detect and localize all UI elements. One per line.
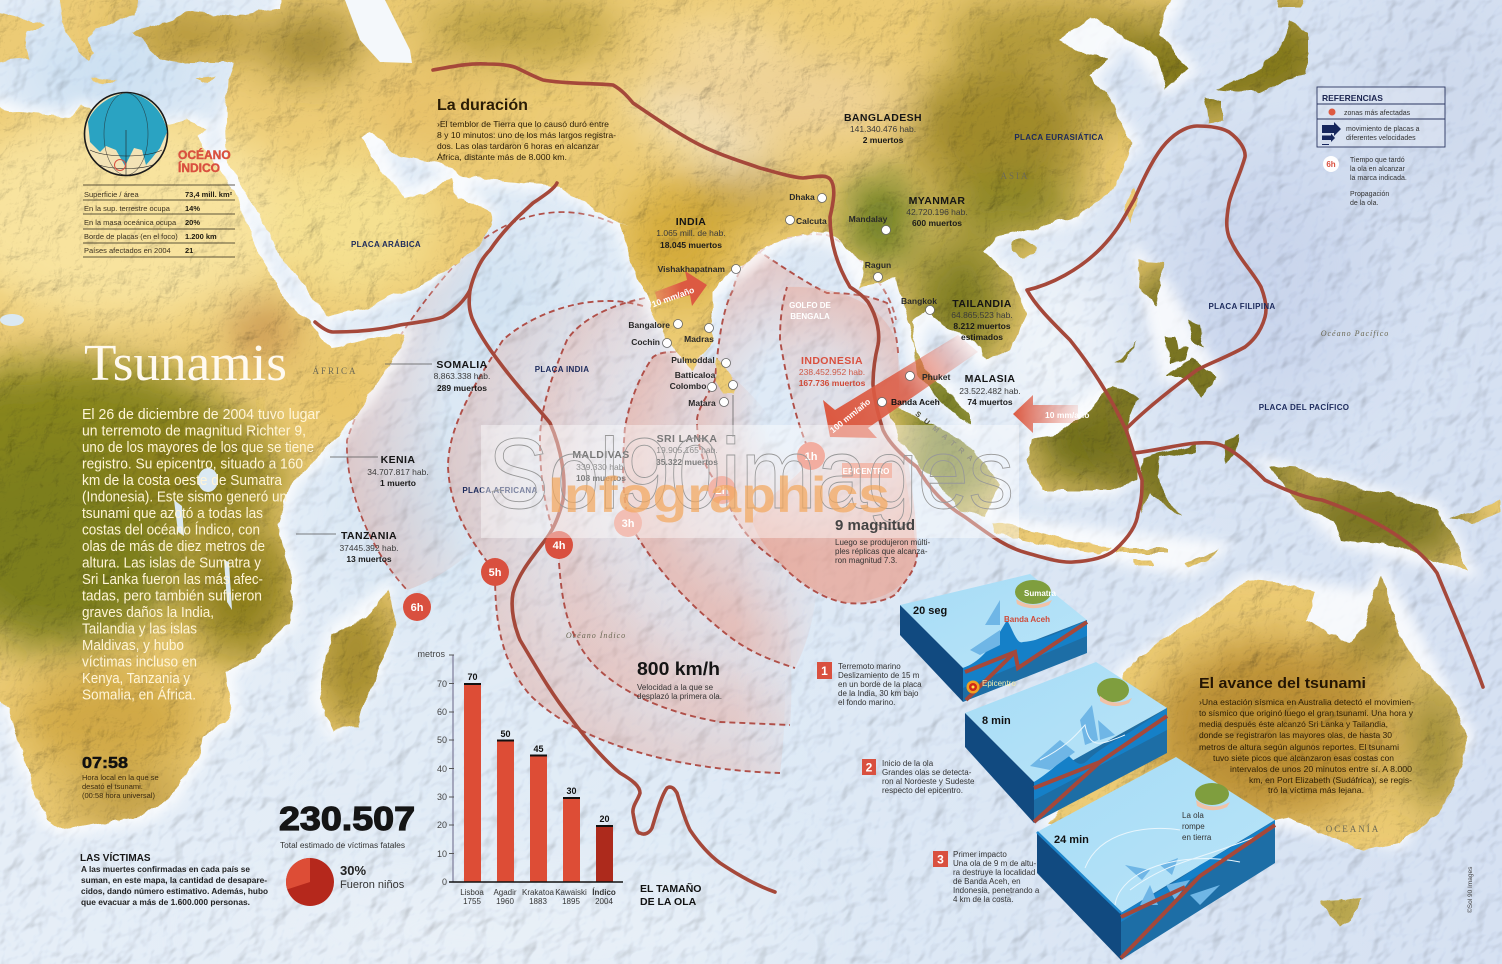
step 1 caption: de la India, 30 km bajo bbox=[838, 689, 919, 698]
plate names: PLACA ARÁBICA bbox=[351, 240, 421, 249]
country: Tailandia: TAILANDIA bbox=[952, 298, 1012, 310]
chart title bbox=[640, 882, 701, 908]
text: 800 km/h: Velocidad a la que se bbox=[637, 683, 714, 692]
country: India bbox=[656, 216, 726, 250]
watermark panel: Sol90images bbox=[488, 418, 1014, 530]
country: Indonesia: 167.736 muertos bbox=[799, 378, 866, 388]
text: 800 km/h bbox=[637, 659, 722, 701]
text: 800 km/h: desplazó la primera ola. bbox=[637, 692, 722, 701]
text block: El avance del tsunami: metros de altura según algunos reportes. El tsunami bbox=[1199, 742, 1399, 752]
legend: Referencias bbox=[1317, 87, 1445, 147]
step 2 caption: respecto del epicentro. bbox=[882, 786, 963, 795]
zone: 6 hours bbox=[347, 212, 613, 590]
geographic names: BENGALA bbox=[790, 312, 830, 321]
country: Maldivas: 108 muertos bbox=[576, 473, 626, 483]
country: Indonesia: INDONESIA bbox=[801, 355, 863, 367]
main paragraph: Tailandia y las islas bbox=[82, 620, 197, 638]
text block: El avance del tsunami: to sísmico que originó luego el gran tsunami. Una hora y bbox=[1199, 708, 1414, 718]
text block: La duración: dos. Las olas tardaron 6 horas en alcanzar bbox=[437, 141, 599, 151]
label: Epicentro: Epicentro bbox=[982, 679, 1016, 688]
step 2 caption: 2 bbox=[866, 760, 873, 774]
country: Malasia: 74 muertos bbox=[967, 397, 1013, 407]
text: 800 km/h: 800 km/h bbox=[637, 659, 720, 679]
text: Las víctimas: LAS VÍCTIMAS bbox=[80, 851, 151, 864]
leader lines bbox=[296, 364, 733, 534]
country: India: INDIA bbox=[676, 216, 706, 228]
main paragraph: (Indonesia). Este sismo generó un bbox=[82, 488, 287, 506]
label: wave breaks on land: La ola bbox=[1182, 811, 1204, 820]
bar chart: El tamaño de la ola: 20 bbox=[437, 820, 447, 830]
text block: La duración: ›El temblor de Tierra que lo causó duró entre bbox=[437, 119, 609, 129]
step 1 caption bbox=[817, 662, 922, 707]
country: India: 18.045 muertos bbox=[660, 240, 722, 250]
text block: El avance del tsunami: km, en Port Elizabeth (Sudáfrica), se regis- bbox=[1249, 775, 1412, 785]
text: 9 magnitud: Luego se produjeron múlti- bbox=[835, 538, 931, 547]
plate names: PLACA EURASIÁTICA bbox=[1014, 133, 1104, 142]
table: Indian Ocean facts: En la sup. terrestre ocupa bbox=[84, 204, 171, 213]
geographic names: OCEANÍA bbox=[1326, 824, 1380, 834]
time marker: 5h bbox=[481, 558, 509, 586]
text: 07:58: (00:58 hora universal) bbox=[82, 791, 155, 800]
text: 9 magnitud: ples réplicas que alcanza- bbox=[835, 547, 928, 556]
text: 9 magnitud: ron magnitud 7.3. bbox=[835, 556, 897, 565]
text block: El avance del tsunami: tró la víctima más lejana. bbox=[1268, 785, 1364, 795]
big number: total victims: 230.507 bbox=[279, 800, 415, 837]
bar chart: El tamaño de la ola: Agadir bbox=[493, 888, 517, 897]
country: Tanzania: TANZANIA bbox=[341, 530, 397, 542]
bar chart: El tamaño de la ola: metros bbox=[417, 649, 445, 659]
country: Tanzania: 37445.392 hab. bbox=[339, 543, 399, 553]
block diagram: 8 min bbox=[965, 662, 1167, 823]
city names: Bangalore bbox=[628, 320, 670, 330]
country: Maldivas bbox=[572, 449, 630, 483]
zone: 2 hours bbox=[697, 252, 917, 603]
main paragraph: olas de más de diez metros de bbox=[82, 538, 265, 555]
bar chart: El tamaño de la ola: 10 bbox=[437, 849, 447, 859]
bar chart: El tamaño de la ola bbox=[417, 649, 623, 906]
geographic names: ASIA bbox=[1000, 171, 1030, 181]
city names: Matara bbox=[688, 398, 716, 408]
main paragraph: tsunami que azotó a todas las bbox=[82, 505, 263, 522]
table: Indian Ocean facts: En la masa oceánica ocupa bbox=[84, 218, 177, 227]
city names: Madras bbox=[684, 334, 714, 344]
main paragraph: costas del océano Índico, con bbox=[82, 522, 260, 538]
chart title: EL TAMAÑO bbox=[640, 882, 701, 895]
text: Las víctimas: que evacuar a más de 1.600.000 personas. bbox=[81, 897, 250, 907]
boundary: Himalaya bbox=[433, 64, 1266, 562]
main paragraph: graves daños la India, bbox=[82, 604, 214, 621]
bar: Agadir 1960 bbox=[497, 729, 514, 882]
country: Bangladesh: 141.340.476 hab. bbox=[850, 124, 916, 134]
city names: Colombo bbox=[670, 381, 706, 391]
text: Las víctimas: suman, en este mapa, la cantidad de desapare- bbox=[81, 875, 267, 885]
zone: 3 hours bbox=[623, 350, 817, 668]
bar: Agadir 1960: 50 bbox=[500, 729, 511, 739]
main paragraph: El 26 de diciembre de 2004 tuvo lugar bbox=[82, 406, 320, 423]
pie chart: children: 30% bbox=[340, 863, 366, 878]
country: Indonesia bbox=[799, 355, 866, 388]
step 1 caption: el fondo marino. bbox=[838, 698, 895, 707]
arrow: 100 mm/año Indonesia bbox=[823, 335, 978, 438]
main paragraph: km de la costa oeste de Sumatra bbox=[82, 472, 283, 489]
geographic names bbox=[312, 171, 1389, 834]
plate names: PLACA DEL PACÍFICO bbox=[1259, 403, 1349, 412]
time marker: 2h bbox=[708, 476, 736, 504]
zone: 5 hours bbox=[448, 301, 785, 773]
country: Maldivas: 339.330 hab. bbox=[576, 462, 626, 472]
country: Somalia: 289 muertos bbox=[437, 383, 487, 393]
block diagram: 24 min bbox=[1037, 757, 1275, 960]
zone: 4 hours bbox=[540, 298, 791, 725]
legend: propagation bbox=[1350, 191, 1389, 207]
table: Indian Ocean facts: Superficie / área bbox=[84, 190, 139, 199]
text block: El avance del tsunami: tuvo siete picos que alcanzaron esas costas con bbox=[1213, 753, 1394, 763]
bar: Índico 2004 bbox=[596, 814, 613, 882]
text: 07:58 bbox=[82, 755, 159, 800]
main paragraph: Kenya, Tanzania y bbox=[82, 670, 190, 687]
city names: Mandalay bbox=[849, 214, 888, 224]
bar chart: El tamaño de la ola: 40 bbox=[437, 764, 447, 774]
step 3 caption: 4 km de la costa. bbox=[953, 895, 1013, 904]
country: Bangladesh bbox=[844, 112, 922, 145]
arrow: 10 mm/año Philippine plate bbox=[1013, 395, 1089, 433]
step 3 caption: Una ola de 9 m de altu- bbox=[953, 859, 1036, 868]
bar: Kawaiski 1895 bbox=[563, 786, 580, 882]
legend: propagation: de la ola. bbox=[1350, 200, 1378, 207]
main paragraph: altura. Las islas de Sumatra y bbox=[82, 554, 261, 572]
icon: epicentre target bbox=[966, 680, 980, 694]
label: Sumatra: Sumatra bbox=[1024, 589, 1057, 598]
step 3 caption: Primer impacto bbox=[953, 850, 1007, 859]
boundary: Molucca to New Guinea bbox=[1134, 443, 1483, 687]
bar chart: El tamaño de la ola: 1895 bbox=[562, 897, 580, 906]
bar chart: El tamaño de la ola: 70 bbox=[437, 679, 447, 689]
text block: La duración: 8 y 10 minutos: uno de los más largos registra- bbox=[437, 130, 616, 140]
text: 07:58: 07:58 bbox=[82, 755, 128, 772]
country: Sri Lanka: SRI LANKA bbox=[657, 433, 717, 445]
plate names: PLACA FILIPINA bbox=[1208, 302, 1276, 311]
country: Myanmar bbox=[906, 195, 968, 228]
bar chart: El tamaño de la ola: 1883 bbox=[529, 897, 547, 906]
legend: time marker: 6h bbox=[1326, 160, 1336, 169]
bar: Krakatoa 1883: 45 bbox=[533, 744, 544, 754]
city names: Banda Aceh bbox=[891, 397, 940, 407]
boundary: Arabia branch bbox=[315, 183, 557, 332]
main paragraph: Maldivas, y hubo bbox=[82, 637, 184, 654]
bar: Kawaiski 1895: 30 bbox=[566, 786, 577, 796]
legend: time marker: la marca indicada. bbox=[1350, 175, 1407, 182]
big number: total victims bbox=[279, 800, 415, 850]
bar chart: El tamaño de la ola: Índico bbox=[592, 888, 616, 897]
zone: 1 hour bbox=[752, 287, 917, 603]
big number: total victims: Total estimado de víctimas fatales bbox=[280, 841, 405, 850]
bar chart: El tamaño de la ola: Krakatoa bbox=[522, 888, 555, 897]
country: Myanmar: MYANMAR bbox=[909, 195, 965, 207]
country: Indonesia: 238.452.952 hab. bbox=[799, 367, 865, 377]
caspian sea bbox=[345, 0, 412, 63]
label: wave breaks on land: en tierra bbox=[1182, 833, 1212, 842]
arrow: 10 mm/año Philippine plate: 10 mm/año bbox=[1045, 410, 1089, 420]
text block: El avance del tsunami: intervalos de unos 20 minutos entre sí. A 8.000 bbox=[1230, 764, 1412, 774]
step 3 caption: de Banda Aceh, en bbox=[953, 877, 1021, 886]
country: Somalia: SOMALIA bbox=[436, 359, 488, 371]
legend: time marker bbox=[1323, 156, 1407, 182]
step 2 caption: Inicio de la ola bbox=[882, 759, 934, 768]
main paragraph: Somalia, en África. bbox=[82, 686, 196, 704]
heading: Océano Índico: OCÉANO bbox=[178, 147, 231, 162]
geographic names: GOLFO DE bbox=[789, 301, 832, 310]
text: 07:58: Hora local en la que se bbox=[82, 773, 159, 782]
table: Indian Ocean facts bbox=[83, 185, 235, 257]
country: Bangladesh: BANGLADESH bbox=[844, 112, 922, 124]
text block: La duración: África, distante más de 8.000 km. bbox=[437, 152, 567, 162]
country: Malasia bbox=[959, 373, 1021, 407]
main paragraph bbox=[82, 406, 320, 704]
geographic names: Océano Pacífico bbox=[1321, 329, 1389, 338]
city names: Ragun bbox=[865, 260, 891, 270]
credit: ©Sol 90 Images bbox=[1466, 866, 1474, 913]
country: Tanzania: 13 muertos bbox=[346, 554, 392, 564]
city names: Vishakhapatnam bbox=[658, 264, 725, 274]
legend: propagation: Propagación bbox=[1350, 191, 1389, 198]
text block: La duración: La duración bbox=[437, 97, 528, 114]
country: India: 1.065 mill. de hab. bbox=[656, 228, 726, 238]
icon: globe locator bbox=[84, 92, 168, 176]
city names: Calcuta bbox=[796, 216, 827, 226]
label: 24 min: 24 min bbox=[1054, 834, 1089, 846]
step 1 caption: 1 bbox=[821, 664, 828, 678]
city names bbox=[628, 192, 951, 408]
table: Indian Ocean facts: 21 bbox=[185, 246, 193, 255]
time marker: 6h bbox=[403, 593, 431, 621]
table: Indian Ocean facts: 1.200 km bbox=[185, 232, 217, 241]
title: Tsunamis bbox=[84, 335, 287, 392]
legend: Referencias: zonas más afectadas bbox=[1344, 110, 1411, 117]
country: Tailandia: 64.865.523 hab. bbox=[951, 310, 1013, 320]
text block: La duración bbox=[437, 97, 616, 162]
main paragraph: uno de los mayores de los que se tiene bbox=[82, 439, 314, 456]
epicentre label bbox=[842, 463, 892, 478]
country: Tailandia: 8.212 muertos bbox=[953, 321, 1011, 331]
bar chart: El tamaño de la ola: Kawaiski bbox=[555, 888, 587, 897]
bar chart: El tamaño de la ola: 2004 bbox=[595, 897, 613, 906]
text: 9 magnitud bbox=[835, 517, 931, 565]
city names: Cochin bbox=[631, 337, 660, 347]
step 3 caption: ra destruye la localidad bbox=[953, 868, 1035, 877]
country: Maldivas: MALDIVAS bbox=[572, 449, 630, 461]
bar: Lisboa 1755: 70 bbox=[467, 672, 478, 682]
city names: Pulmoddal bbox=[671, 355, 715, 365]
country: Kenia: 1 muerto bbox=[380, 478, 416, 488]
step 2 caption: Grandes olas se detecta- bbox=[882, 768, 972, 777]
table: Indian Ocean facts: 73,4 mill. km² bbox=[185, 190, 233, 199]
tsunami propagation zones bbox=[347, 212, 917, 773]
country: Sri Lanka: 19.905.165 hab. bbox=[656, 445, 718, 455]
table: Indian Ocean facts: 20% bbox=[185, 218, 200, 227]
chart title: DE LA OLA bbox=[640, 896, 697, 908]
plate names bbox=[351, 133, 1349, 495]
geographic names: ÁFRICA bbox=[312, 366, 358, 376]
text block: El avance del tsunami: ›Una estación sísmica en Australia detectó el movimien- bbox=[1199, 697, 1414, 707]
country: Tailandia bbox=[951, 298, 1013, 342]
country: Myanmar: 600 muertos bbox=[912, 218, 962, 228]
step 3 caption: Indonesia, penetrando a bbox=[953, 886, 1040, 895]
text: Las víctimas bbox=[80, 851, 268, 907]
country: Somalia bbox=[434, 359, 490, 393]
country: Kenia: 34.707.817 hab. bbox=[367, 467, 429, 477]
step 1 caption: Terremoto marino bbox=[838, 662, 901, 671]
table: Indian Ocean facts: Países afectados en 2004 bbox=[84, 246, 171, 255]
table: Indian Ocean facts: Borde de placas (en el foco) bbox=[84, 232, 178, 241]
label: 8 min: 8 min bbox=[982, 715, 1011, 727]
legend: plate movement arrows bbox=[1322, 122, 1341, 145]
bar chart: El tamaño de la ola: 50 bbox=[437, 735, 447, 745]
arrow: 10 mm/año India: 10 mm/año bbox=[650, 285, 696, 309]
country: Sri Lanka: 35.322 muertos bbox=[656, 457, 718, 467]
country: Myanmar: 42.720.196 hab. bbox=[906, 207, 968, 217]
tectonic plate boundaries bbox=[315, 64, 1483, 892]
block diagram: 20 seg bbox=[900, 574, 1087, 702]
legend: time marker: Tiempo que tardó bbox=[1350, 157, 1405, 164]
bar chart: El tamaño de la ola: 1960 bbox=[496, 897, 514, 906]
city markers bbox=[662, 194, 934, 406]
pie chart: children bbox=[286, 858, 405, 906]
text: 9 magnitud: 9 magnitud bbox=[835, 517, 915, 534]
geographic names: Océano Índico bbox=[566, 630, 626, 640]
heading: Océano Índico: ÍNDICO bbox=[178, 160, 220, 175]
step 1 caption: Deslizamiento de 15 m bbox=[838, 671, 920, 680]
time marker: 6h: 6h bbox=[411, 602, 424, 614]
bar chart: El tamaño de la ola: 30 bbox=[437, 792, 447, 802]
country: Tanzania bbox=[339, 530, 399, 564]
time marker: 1h bbox=[797, 442, 825, 470]
geographic names: SUMATRA bbox=[913, 409, 980, 467]
country: Tailandia: estimados bbox=[961, 332, 1003, 342]
table: Indian Ocean facts: 14% bbox=[185, 204, 200, 213]
text: 07:58: desató el tsunami. bbox=[82, 782, 143, 791]
label: wave breaks on land: rompe bbox=[1182, 822, 1205, 831]
text: Las víctimas: cidos, dando número estimativo. Además, hubo bbox=[81, 886, 268, 896]
country: Malasia: 23.522.482 hab. bbox=[959, 386, 1021, 396]
plate names: PLACA AFRICANA bbox=[462, 486, 538, 495]
step 1 caption: en un borde de la placa bbox=[838, 680, 922, 689]
bar chart: El tamaño de la ola: 60 bbox=[437, 707, 447, 717]
time marker: 1h: 1h bbox=[805, 451, 818, 463]
pie chart: children: Fueron niños bbox=[340, 879, 405, 891]
legend: time marker: la ola en alcanzar bbox=[1350, 166, 1406, 173]
text block: El avance del tsunami bbox=[1199, 675, 1414, 795]
boundary: Mid-ocean ridge bbox=[469, 290, 775, 892]
time marker: 2h: 2h bbox=[716, 485, 729, 497]
step 3 caption: 3 bbox=[937, 852, 944, 866]
city names: Phuket bbox=[922, 372, 951, 382]
city names: Dhaka bbox=[789, 192, 815, 202]
time marker: 4h: 4h bbox=[553, 540, 566, 552]
zone: bay of bengal arc bbox=[760, 234, 896, 320]
main paragraph: registro. Su epicentro, situado a 160 bbox=[82, 456, 303, 472]
legend: Referencias: REFERENCIAS bbox=[1322, 93, 1383, 103]
country: Kenia bbox=[367, 454, 429, 488]
country: Malasia: MALASIA bbox=[965, 373, 1015, 385]
label: wave breaks on land bbox=[1182, 811, 1212, 842]
text block: El avance del tsunami: media después éste alcanzó Sri Lanka y Tailandia, bbox=[1199, 719, 1388, 729]
city names: Batticaloa bbox=[675, 370, 716, 380]
main paragraph: víctimas incluso en bbox=[82, 654, 197, 670]
african lakes bbox=[0, 314, 232, 610]
bar chart: El tamaño de la ola: 0 bbox=[442, 877, 447, 887]
text: Las víctimas: A las muertes confirmadas en cada país se bbox=[81, 864, 250, 874]
legend: Referencias: movimiento de placas a bbox=[1346, 126, 1420, 133]
country: Sri Lanka bbox=[656, 433, 718, 467]
step 2 caption bbox=[862, 759, 975, 795]
bar: Krakatoa 1883 bbox=[530, 744, 547, 882]
city names: Bangkok bbox=[901, 296, 937, 306]
step 3 caption bbox=[933, 850, 1040, 904]
bar chart: El tamaño de la ola: Lisboa bbox=[460, 888, 484, 897]
bar: Lisboa 1755 bbox=[464, 672, 481, 882]
heading: Océano Índico bbox=[178, 147, 231, 175]
arrow: 100 mm/año Indonesia: 100 mm/año bbox=[828, 396, 872, 435]
step 2 caption: ron al Noroeste y Sudeste bbox=[882, 777, 975, 786]
label: 20 seg: 20 seg bbox=[913, 605, 947, 617]
country: Somalia: 8.863.338 hab. bbox=[434, 371, 490, 381]
text block: El avance del tsunami: donde se registraron las mayores olas, de hasta 30 bbox=[1199, 730, 1392, 740]
time marker: 4h bbox=[545, 531, 573, 559]
label: Banda Aceh: Banda Aceh bbox=[1004, 615, 1050, 624]
time marker: 3h bbox=[614, 509, 642, 537]
epicentre label: EPICENTRO bbox=[843, 467, 889, 476]
watermark panel: Infographics bbox=[548, 467, 890, 523]
main paragraph: Sri Lanka fueron las más afec- bbox=[82, 571, 263, 588]
arrow: 10 mm/año India bbox=[650, 271, 707, 309]
country: Kenia: KENIA bbox=[381, 454, 415, 466]
legend: affected zones dot bbox=[1328, 108, 1336, 116]
main paragraph: tadas, pero también sufrieron bbox=[82, 588, 262, 604]
country: Bangladesh: 2 muertos bbox=[863, 135, 904, 145]
text block: El avance del tsunami: El avance del tsunami bbox=[1199, 675, 1366, 692]
plate names: PLACA INDIA bbox=[535, 365, 589, 374]
bar: Índico 2004: 20 bbox=[599, 814, 610, 824]
time marker: 5h: 5h bbox=[489, 567, 502, 579]
legend: Referencias: diferentes velocidades bbox=[1346, 135, 1416, 142]
bar chart: El tamaño de la ola: 1755 bbox=[463, 897, 481, 906]
main paragraph: un terremoto de magnitud Richter 9, bbox=[82, 422, 306, 440]
time marker: 3h: 3h bbox=[622, 518, 635, 530]
